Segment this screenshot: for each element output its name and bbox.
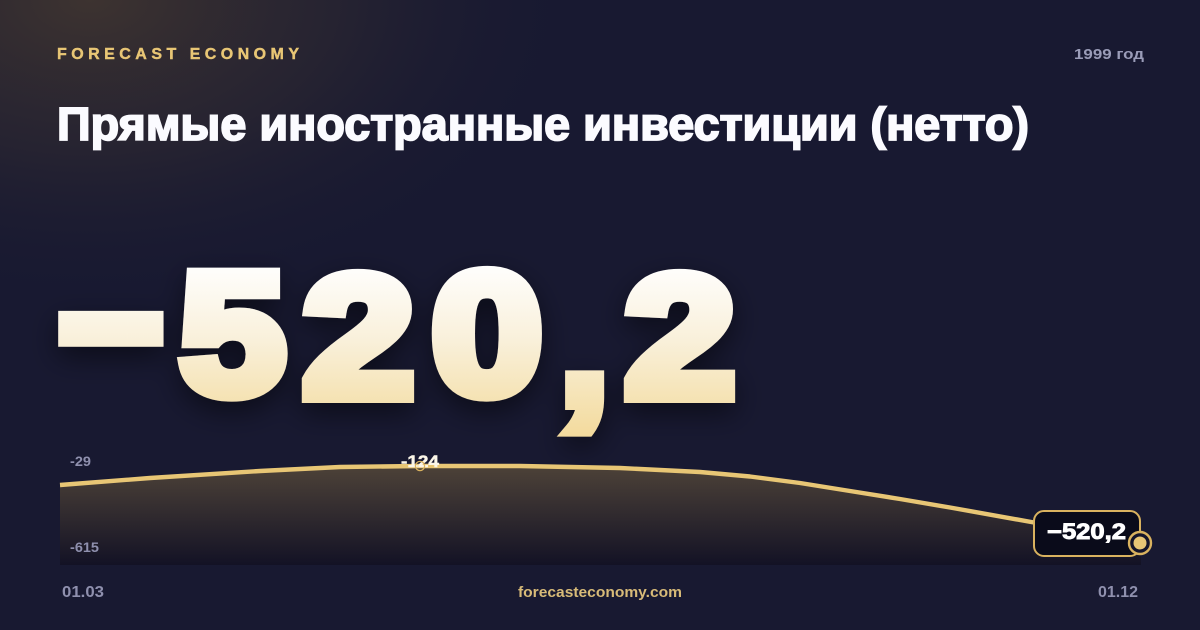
axis max label: -29 bbox=[70, 453, 91, 469]
axis min label: -615 bbox=[70, 539, 99, 555]
area fill bbox=[60, 466, 1141, 565]
peak marker bbox=[415, 461, 425, 471]
peak label: -124 bbox=[401, 452, 440, 471]
trend line bbox=[60, 466, 1140, 543]
year label: 1999 год bbox=[1074, 46, 1145, 63]
website: forecasteconomy.com bbox=[518, 585, 682, 601]
current value callout bbox=[1034, 511, 1140, 556]
brand label: FORECAST ECONOMY bbox=[57, 46, 299, 63]
big value bbox=[60, 231, 735, 440]
start date: 01.03 bbox=[62, 584, 104, 601]
title: Прямые иностранные инвестиции (нетто) bbox=[57, 98, 1029, 150]
big value: − bbox=[60, 231, 162, 423]
end date: 01.12 bbox=[1098, 584, 1138, 601]
area chart bbox=[60, 452, 1141, 565]
big value: 2 bbox=[303, 241, 414, 433]
big value: 2 bbox=[625, 241, 735, 433]
big value: 0 bbox=[432, 238, 542, 430]
big value: , bbox=[560, 248, 609, 440]
current value callout: −520,2 bbox=[1047, 519, 1126, 544]
end marker bbox=[1129, 532, 1151, 554]
big value: 5 bbox=[180, 238, 285, 430]
